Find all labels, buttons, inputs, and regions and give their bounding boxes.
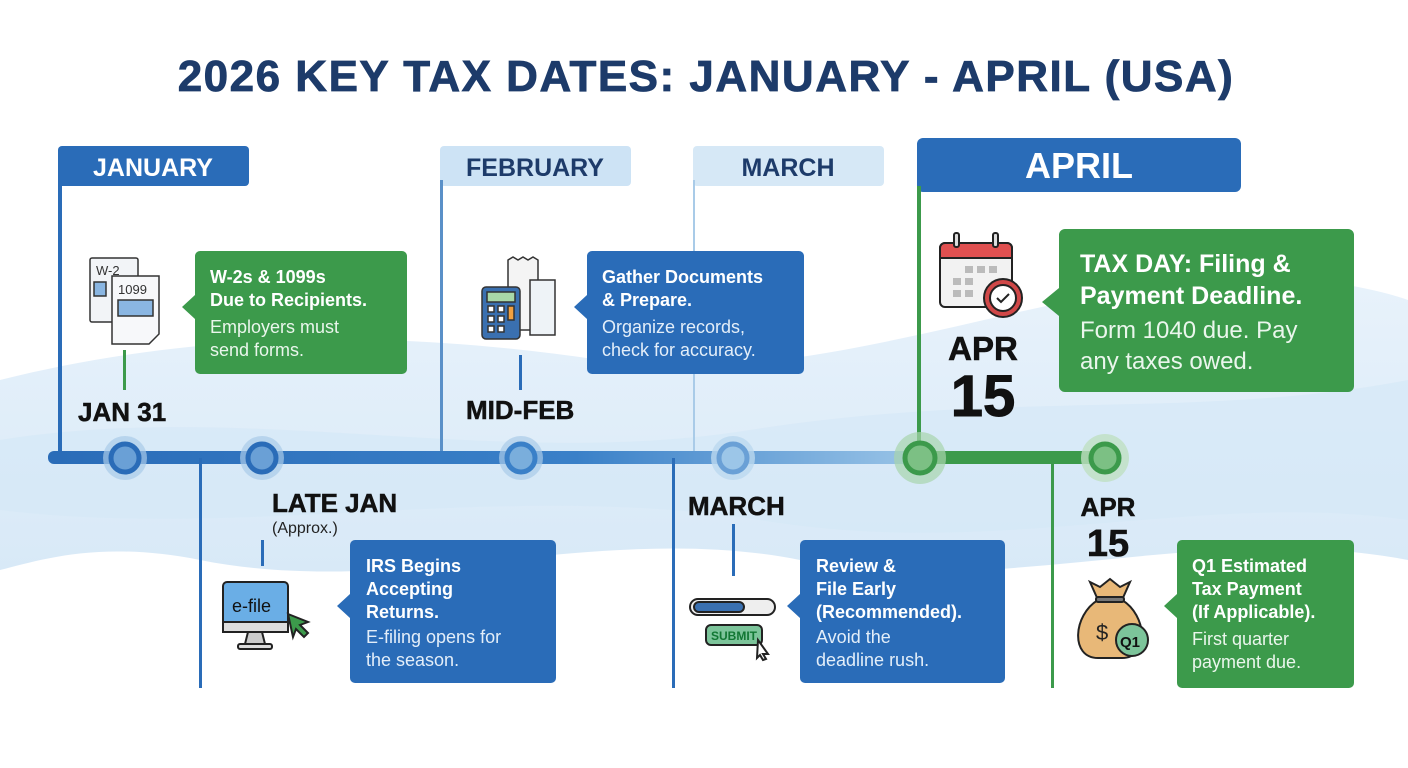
callout: IRS Begins: Returns.: [366, 602, 439, 622]
callout: Gather Documents: Gather Documents: [602, 267, 763, 287]
event: MARCH: MARCH: [688, 491, 785, 521]
month tab: January: JANUARY: [93, 154, 213, 182]
event: LATE JAN: (Approx.): [272, 520, 338, 537]
callout: Gather Documents: check for accuracy.: [602, 340, 756, 360]
callout: Q1 Estimated: First quarter: [1192, 629, 1289, 649]
callout: TAX DAY: Payment Deadline.: [1080, 282, 1302, 310]
callout: Gather Documents: [574, 251, 804, 374]
event: TAX DAY APR 15: [940, 229, 1354, 429]
callout: TAX DAY: [1042, 229, 1354, 392]
event: TAX DAY APR 15: APR: [948, 330, 1018, 367]
timeline: [48, 451, 1105, 688]
callout: Q1 Estimated: Q1 Estimated: [1192, 556, 1307, 576]
icon: progress bar and submit: [690, 599, 775, 660]
month tab: March: [693, 146, 884, 456]
callout: Q1 Estimated: Tax Payment: [1192, 579, 1302, 599]
month tab: January: [58, 146, 249, 456]
callout: Gather Documents: & Prepare.: [602, 290, 692, 310]
callout: W-2s: send forms.: [210, 340, 304, 360]
callout: Q1 Estimated: [1164, 540, 1354, 688]
icon: calculator and receipts: [482, 257, 555, 339]
callout: TAX DAY: any taxes owed.: [1080, 348, 1253, 375]
callout: W-2s: W-2s & 1099s: [210, 267, 326, 287]
event: Q1 APR 15: APR: [1081, 492, 1136, 522]
callout: IRS Begins: E-filing opens for: [366, 627, 501, 647]
event: JAN 31: JAN 31: [78, 397, 166, 427]
background waves: [0, 277, 1408, 572]
month tab: March: MARCH: [741, 154, 835, 182]
callout: IRS Begins: [337, 540, 556, 683]
callout: W-2s: Due to Recipients.: [210, 290, 367, 310]
icon: money bag: Q1: [1120, 634, 1140, 651]
callout: IRS Begins: the season.: [366, 650, 459, 670]
callout: IRS Begins: Accepting: [366, 579, 453, 599]
icon: calendar with clock: [940, 233, 1022, 317]
event: TAX DAY APR 15: 15: [951, 364, 1015, 429]
callout: Review & File Early: deadline rush.: [816, 650, 929, 670]
callout: Review & File Early: Avoid the: [816, 627, 891, 647]
month tab: February: [440, 146, 631, 456]
callout: TAX DAY: Form 1040 due. Pay: [1080, 317, 1297, 344]
callout: Review & File Early: File Early: [816, 579, 896, 599]
event: LATE JAN: LATE JAN: [272, 488, 397, 518]
icon: money bag: [1078, 579, 1148, 658]
icon: e-file monitor: e-file: [232, 596, 271, 616]
icon: money bag: $: [1096, 620, 1108, 645]
callout: Review & File Early: Review &: [816, 556, 896, 576]
callout: Gather Documents: Organize records,: [602, 317, 745, 337]
callout: Review & File Early: (Recommended).: [816, 602, 962, 622]
month tab: February: FEBRUARY: [466, 154, 604, 182]
callout: TAX DAY: TAX DAY: Filing &: [1080, 250, 1291, 278]
title: 2026 KEY TAX DATES: JANUARY - APRIL (USA): [178, 52, 1234, 101]
timeline nodes: [103, 432, 1129, 484]
callout: W-2s: Employers must: [210, 317, 339, 337]
event: Q1 APR 15: 15: [1087, 523, 1129, 565]
event: MARCH: [688, 491, 1005, 683]
icon: W-2 and 1099 forms: 1099: [118, 282, 147, 297]
callout: IRS Begins: IRS Begins: [366, 556, 461, 576]
month tab: April: APRIL: [1025, 145, 1133, 186]
event: JAN 31: [78, 251, 407, 427]
event: Q1 APR 15: [1078, 492, 1354, 688]
callout: Q1 Estimated: (If Applicable).: [1192, 602, 1315, 622]
icon: W-2 and 1099 forms: [90, 258, 159, 344]
event: LATE JAN: [223, 488, 556, 683]
event: MID-FEB: MID-FEB: [466, 395, 574, 425]
callout: Q1 Estimated: payment due.: [1192, 652, 1301, 672]
callout: Review & File Early: [787, 540, 1005, 683]
icon: e-file monitor: [223, 582, 308, 649]
month tab: April: [917, 138, 1241, 458]
icon: W-2 and 1099 forms: W-2: [96, 263, 120, 278]
callout: W-2s: [182, 251, 407, 374]
event: MID-FEB: [466, 251, 804, 425]
icon: progress bar and submit: SUBMIT: [711, 629, 758, 643]
